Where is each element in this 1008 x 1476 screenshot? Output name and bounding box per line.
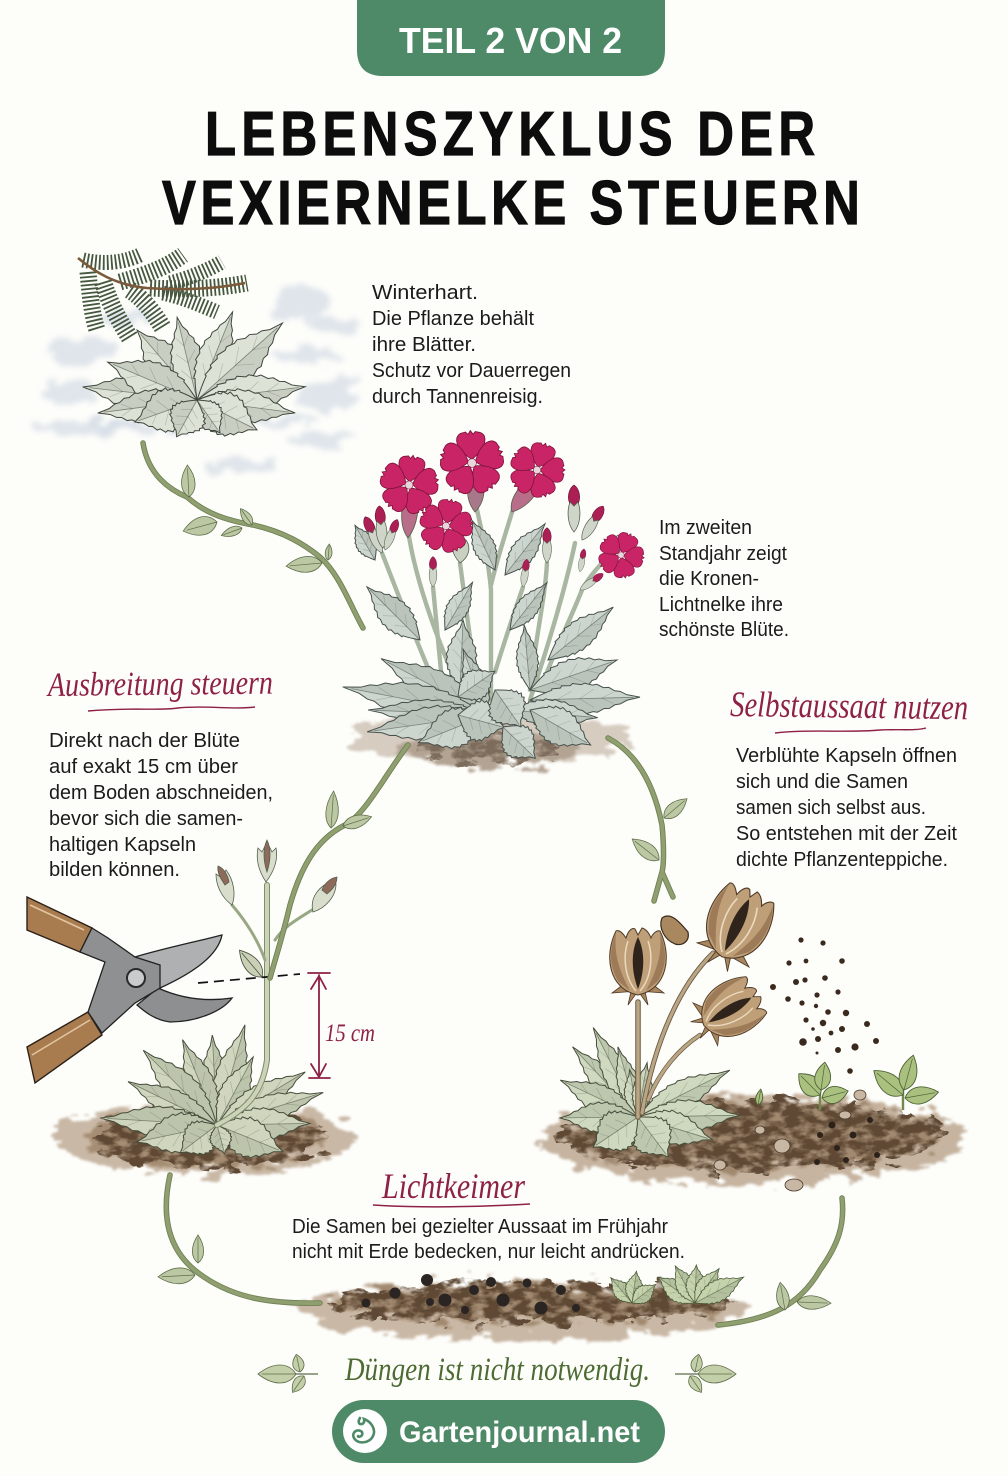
soil	[55, 1102, 355, 1174]
calyxes	[402, 480, 625, 563]
illustration: seed capsules, scattering seeds and seedlings	[540, 877, 964, 1191]
upper blade	[115, 935, 222, 1003]
stems	[382, 493, 610, 713]
buds	[361, 485, 607, 593]
dimension: 15 cm: 15 cm	[325, 1020, 375, 1047]
arrow: bloom to cut stem	[270, 745, 408, 978]
rosette	[81, 306, 307, 450]
arrow: cut plant to sowing	[158, 1175, 320, 1303]
body text: Die Samen bei gezielter Aussaat im Frühjahr	[292, 1216, 668, 1238]
text: winter hardiness: Schutz vor Dauerregen	[372, 360, 571, 382]
top banner: part label	[357, 0, 665, 76]
capsule stems	[638, 953, 713, 1117]
lower blade	[137, 988, 232, 1022]
body text: dichte Pflanzenteppiche.	[736, 849, 948, 871]
footer badge: Gartenjournal.net	[332, 1400, 665, 1463]
body text: sich und die Samen	[736, 771, 908, 793]
arrow: winter to bloom	[143, 443, 363, 628]
cut line	[198, 974, 300, 983]
dimension: 15 cm	[308, 973, 375, 1078]
rosette	[99, 1021, 327, 1170]
capsules	[610, 877, 781, 1053]
text: second year bloom: Standjahr zeigt	[659, 543, 787, 565]
body text: Verblühte Kapseln öffnen	[736, 745, 957, 767]
arrow: bloom to seed capsules	[608, 738, 691, 901]
body text	[292, 1216, 685, 1263]
panel: Ausbreitung steuern	[46, 665, 273, 881]
lower handle	[27, 1012, 102, 1083]
snow patches	[35, 287, 361, 473]
body text: samen sich selbst aus.	[736, 797, 926, 819]
arrow: sowing to capsule plant	[718, 1198, 843, 1325]
joint body	[80, 928, 160, 1033]
text: second year bloom: die Kronen-	[659, 568, 759, 590]
text: second year bloom: Im zweiten	[659, 517, 752, 539]
title	[162, 100, 860, 238]
text: winter hardiness: Winterhart.	[372, 282, 478, 304]
body text: auf exakt 15 cm über	[49, 756, 238, 778]
text: winter hardiness	[372, 282, 571, 408]
text: second year bloom	[659, 517, 789, 641]
text: winter hardiness: Die Pflanze behält	[372, 308, 534, 330]
heading: Lichtkeimer	[381, 1166, 526, 1206]
top banner: part label: TEIL 2 VON 2	[399, 20, 622, 61]
main stem	[217, 885, 315, 1125]
text: second year bloom: Lichtnelke ihre	[659, 594, 783, 616]
body text: haltigen Kapseln	[49, 834, 196, 856]
illustration: pruning shears	[27, 897, 232, 1083]
illustration: soil with seeds and seedlings	[298, 1261, 749, 1338]
body text: bevor sich die samen-	[49, 808, 243, 830]
decorative sprig right	[675, 1353, 736, 1396]
body text: Direkt nach der Blüte	[49, 730, 240, 752]
pebbles in soil	[714, 1090, 866, 1191]
seedlings	[755, 1053, 940, 1110]
title: LEBENSZYKLUS DER	[205, 100, 815, 169]
flowers	[372, 429, 654, 588]
pivot bolt	[127, 969, 145, 987]
footer badge: Gartenjournal.net: Gartenjournal.net	[399, 1416, 640, 1449]
illustration: winter plant in snow with fir branch	[35, 255, 361, 473]
loose capsule fragment	[661, 916, 688, 944]
body text	[736, 745, 957, 871]
side leaf	[234, 945, 268, 982]
panel: Lichtkeimer	[292, 1166, 749, 1338]
text: winter hardiness: ihre Blätter.	[372, 334, 476, 356]
body text: bilden können.	[49, 859, 180, 881]
soil	[540, 1096, 964, 1184]
fir branch	[78, 255, 247, 338]
basal leaves	[339, 516, 640, 771]
title: VEXIERNELKE STEUERN	[162, 169, 860, 238]
falling seeds	[770, 937, 879, 1074]
body text: dem Boden abschneiden,	[49, 782, 273, 804]
body text: So entstehen mit der Zeit	[736, 823, 957, 845]
decorative sprig left	[258, 1353, 318, 1396]
panel: Selbstaussaat nutzen	[730, 684, 968, 871]
text: winter hardiness: durch Tannenreisig.	[372, 386, 543, 408]
body text: nicht mit Erde bedecken, nur leicht andrücken.	[292, 1241, 685, 1263]
text: second year bloom: schönste Blüte.	[659, 619, 789, 641]
illustration: flowering plant	[339, 429, 654, 771]
upper handle	[27, 897, 92, 952]
closing note: Düngen ist nicht notwendig.	[344, 1352, 650, 1388]
body text	[49, 730, 273, 881]
icon: logo	[343, 1409, 387, 1453]
heading: Ausbreitung steuern	[46, 665, 273, 704]
illustration: cut-back plant with soil	[55, 840, 355, 1174]
buds	[216, 840, 337, 912]
soil	[350, 712, 630, 766]
rosette	[554, 1022, 740, 1170]
